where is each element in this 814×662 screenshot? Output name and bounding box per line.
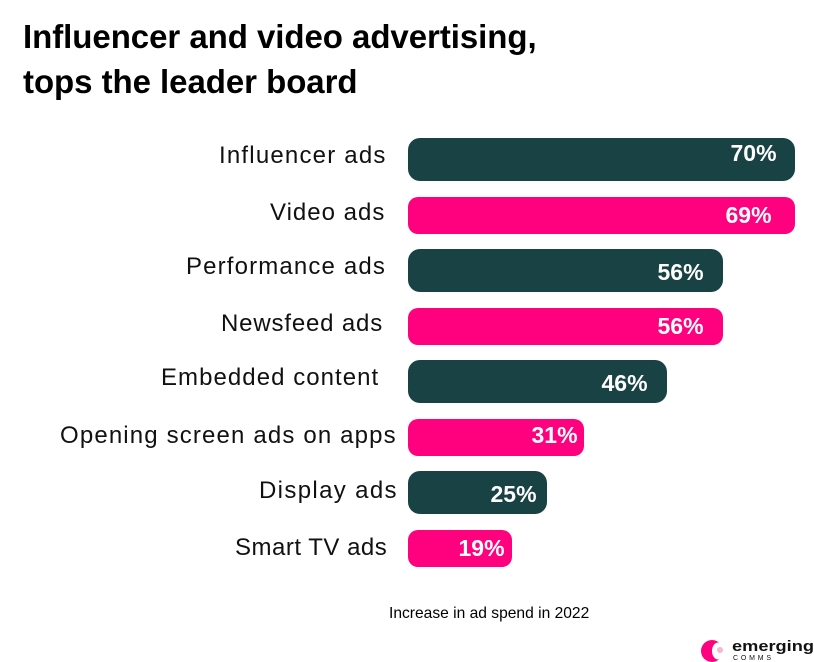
bar: Video ads 69%: 69% xyxy=(726,202,772,228)
logo: emerging comms xyxy=(701,638,814,662)
label: Video ads: Video ads xyxy=(270,199,385,226)
label: Smart TV ads: Smart TV ads xyxy=(235,534,387,561)
label: Embedded content: Embedded content xyxy=(161,364,379,391)
bar: Video ads 69% xyxy=(408,197,795,234)
logo wordmark: COMMS xyxy=(733,655,773,662)
title: Influencer and video advertising, xyxy=(23,18,537,55)
label: Opening screen ads on apps: Opening screen ads on apps xyxy=(60,422,397,449)
bar: Influencer ads 70%: 70% xyxy=(730,140,777,166)
bar: Smart TV ads 19% xyxy=(408,530,512,567)
bar: Smart TV ads 19%: 19% xyxy=(458,535,505,561)
label: Display ads: Display ads xyxy=(259,477,398,504)
bar: Newsfeed ads 56%: 56% xyxy=(658,313,704,339)
title: tops the leader board xyxy=(23,63,358,100)
bar: Performance ads 56%: 56% xyxy=(658,259,704,285)
icon: logo circle xyxy=(701,640,724,662)
label: Performance ads: Performance ads xyxy=(186,253,386,280)
bar: Newsfeed ads 56% xyxy=(408,308,723,345)
bar: Display ads 25%: 25% xyxy=(490,481,537,507)
bar: Embedded content 46% xyxy=(408,360,666,403)
title xyxy=(23,18,537,100)
bar: Opening screen ads on apps 31%: 31% xyxy=(532,422,578,448)
logo wordmark: emerging xyxy=(732,638,814,655)
label: Newsfeed ads: Newsfeed ads xyxy=(221,310,383,337)
bar: Display ads 25% xyxy=(408,471,547,514)
footnote: Increase in ad spend in 2022 xyxy=(389,605,589,622)
logo wordmark xyxy=(732,638,814,662)
bar: Embedded content 46%: 46% xyxy=(602,370,648,396)
label: Influencer ads: Influencer ads xyxy=(219,142,387,169)
bar: Performance ads 56% xyxy=(408,249,723,292)
bar: Influencer ads 70% xyxy=(408,138,795,181)
bar: Opening screen ads on apps 31% xyxy=(408,419,584,456)
